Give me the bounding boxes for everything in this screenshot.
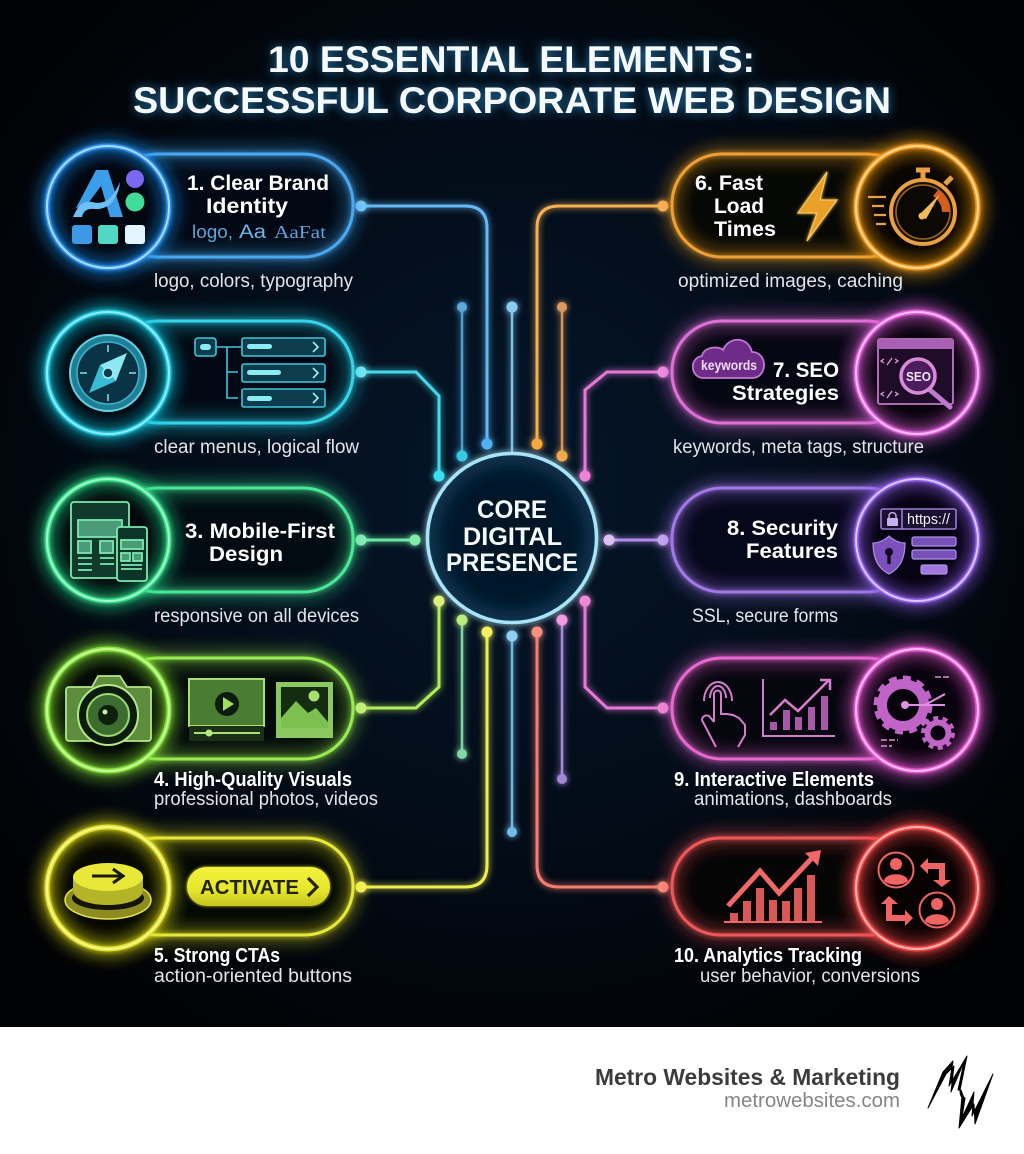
icon: menu tree	[195, 338, 325, 407]
heading: 4. High-Quality Visuals	[154, 769, 352, 791]
central hub: core digital presence	[428, 454, 596, 622]
footer url: metrowebsites.com	[724, 1090, 900, 1112]
panel 5: strong CTAs	[47, 827, 353, 987]
icon: shield with keyhole	[873, 536, 905, 574]
heading: 6. Fast	[695, 172, 763, 195]
title: 10 ESSENTIAL ELEMENTS:	[268, 39, 755, 80]
heading: Strategies	[732, 382, 839, 405]
icon: SEO browser window	[878, 339, 953, 407]
icon: touch hand	[702, 682, 745, 747]
heading	[185, 520, 335, 566]
heading: 7. SEO	[773, 359, 839, 382]
panel 7: SEO strategies	[672, 312, 978, 458]
icon: users exchange	[878, 852, 954, 928]
icon: video player	[189, 679, 264, 741]
connector dots	[356, 200, 668, 892]
caption: clear menus, logical flow	[154, 437, 359, 458]
icon: camera	[66, 676, 151, 745]
icon: https address bar	[881, 509, 956, 529]
icon: picture frame	[276, 682, 333, 738]
caption: keywords, meta tags, structure	[673, 437, 924, 458]
panel 3: mobile-first design	[47, 479, 359, 627]
caption: SSL, secure forms	[692, 606, 838, 627]
central hub: core digital presence: CORE	[477, 496, 547, 524]
heading: 8. Security	[727, 517, 838, 540]
heading: Load	[714, 195, 764, 218]
heading: Identity	[206, 195, 288, 218]
icon: keywords cloud	[693, 340, 764, 378]
icon: SEO browser window: SEO	[906, 370, 931, 384]
panel 10: analytics tracking	[672, 827, 978, 987]
heading: 9. Interactive Elements	[674, 769, 874, 791]
heading: Design	[209, 543, 283, 566]
heading	[727, 517, 838, 563]
icon: tablet and phone	[71, 502, 147, 581]
icon: secure form	[912, 537, 956, 574]
icon: dashboard chart	[763, 679, 835, 736]
icon: brand logo and swatches	[72, 170, 145, 244]
central hub: core digital presence: DIGITAL	[463, 523, 562, 551]
panel 4: high-quality visuals	[47, 649, 378, 810]
heading: Features	[746, 540, 838, 563]
typography sample: Aa	[239, 222, 266, 243]
footer band	[0, 1027, 1024, 1154]
caption: user behavior, conversions	[700, 966, 920, 987]
heading: 5. Strong CTAs	[154, 945, 280, 967]
panel 6: fast load times	[672, 146, 978, 292]
icon: MW signature logo	[928, 1056, 993, 1128]
heading: 3. Mobile-First	[185, 520, 335, 543]
caption: optimized images, caching	[678, 271, 903, 292]
caption: action-oriented buttons	[154, 966, 352, 987]
panel 2: navigation	[47, 312, 359, 458]
icon: push button	[65, 863, 151, 919]
typography sample: AaFat	[274, 222, 326, 242]
panel 9: interactive elements	[672, 649, 978, 810]
footer brand name: Metro Websites & Marketing	[595, 1064, 900, 1090]
icon: compass	[70, 335, 146, 411]
central hub: core digital presence: PRESENCE	[446, 549, 578, 577]
connector lines	[361, 206, 663, 887]
panel 8: security features	[672, 479, 978, 627]
activate button	[187, 867, 330, 906]
heading	[732, 359, 839, 405]
icon: stopwatch	[868, 170, 955, 244]
caption: responsive on all devices	[154, 606, 359, 627]
heading: Times	[714, 218, 776, 241]
icon: keywords cloud: keywords	[701, 357, 757, 373]
icon: lightning bolt	[798, 172, 837, 241]
icon: https address bar: https://	[907, 512, 951, 528]
panel 1: clear brand identity	[47, 146, 353, 292]
title	[133, 39, 891, 121]
heading	[695, 172, 776, 241]
typography sample	[192, 222, 326, 243]
caption: logo, colors, typography	[154, 271, 353, 292]
activate button: ACTIVATE	[200, 877, 299, 899]
icon: gears	[876, 677, 953, 748]
heading: 10. Analytics Tracking	[674, 945, 862, 967]
heading: 1. Clear Brand	[187, 172, 329, 195]
caption: animations, dashboards	[694, 789, 892, 810]
caption: professional photos, videos	[154, 789, 378, 810]
heading	[187, 172, 329, 218]
title: SUCCESSFUL CORPORATE WEB DESIGN	[133, 80, 891, 121]
icon: growth chart	[724, 850, 822, 922]
typography sample: logo,	[192, 222, 233, 242]
